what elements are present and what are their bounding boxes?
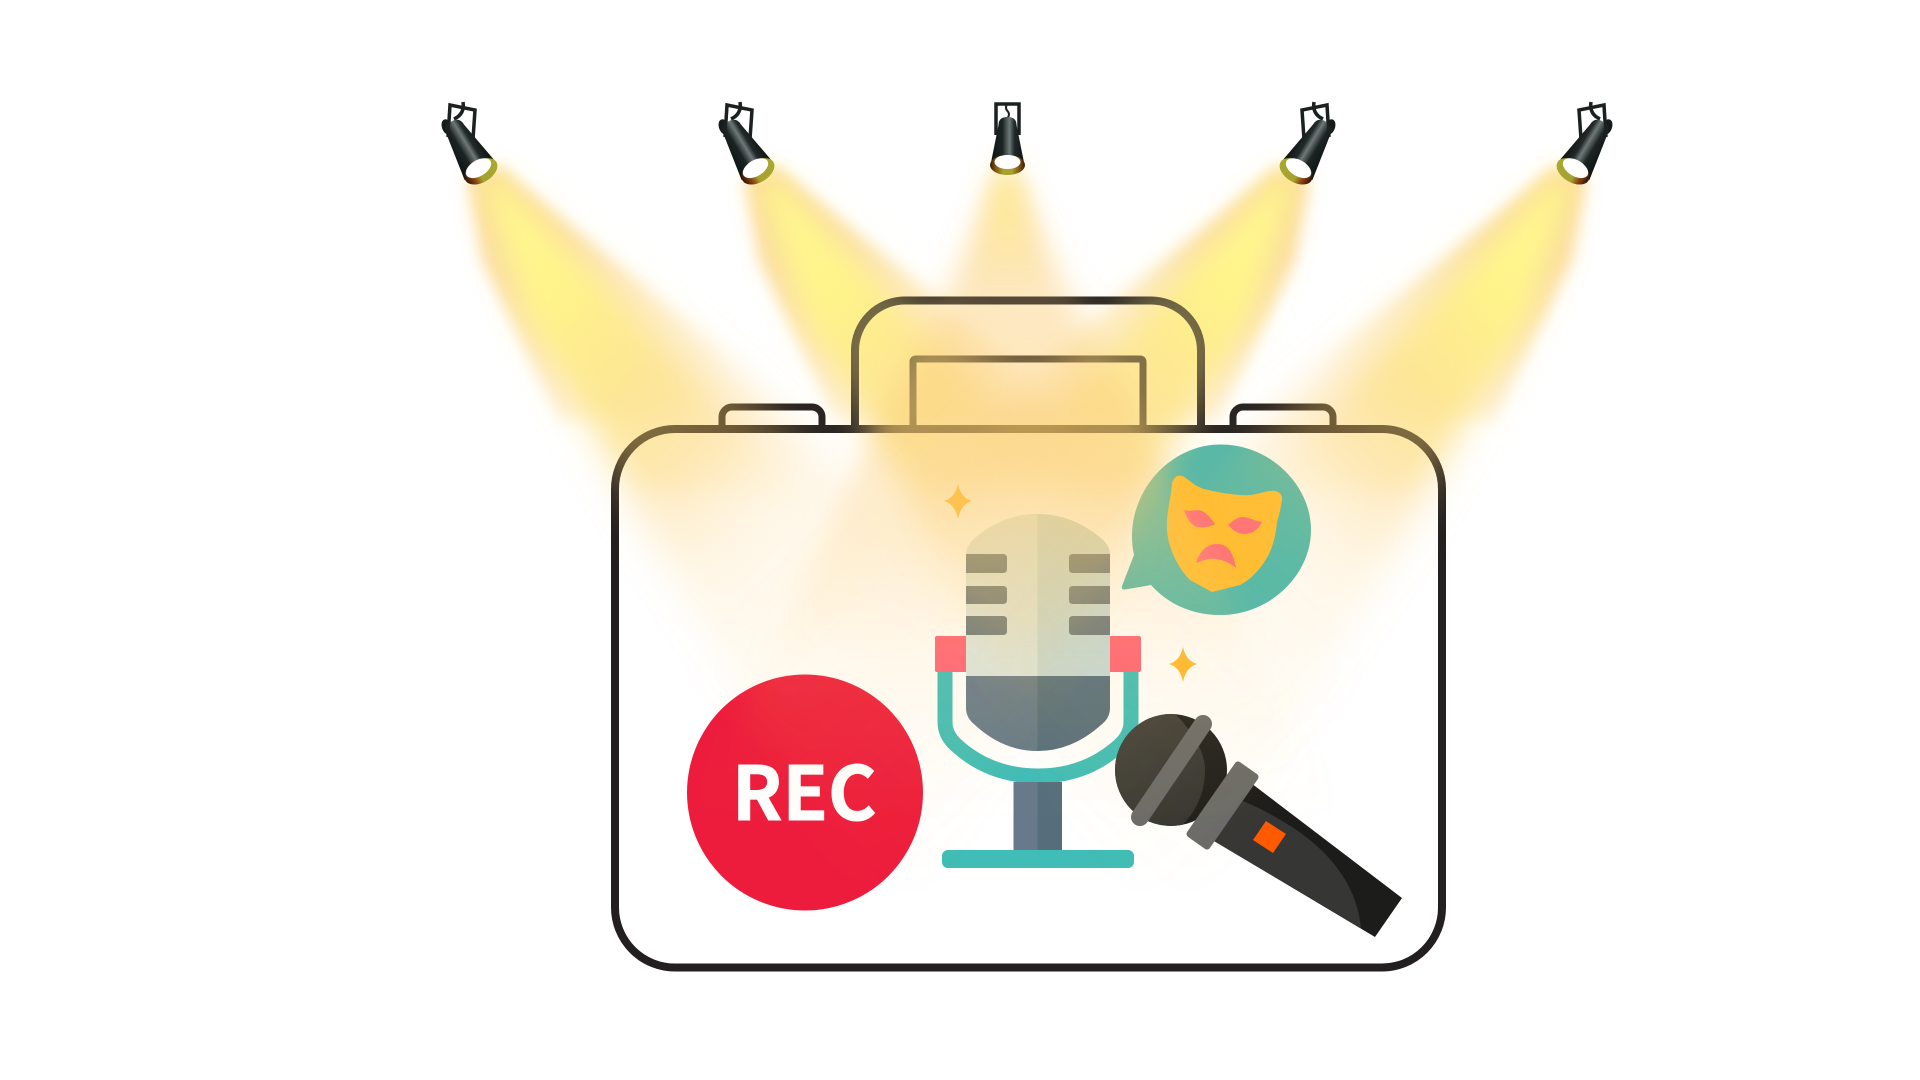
mic collar bbox=[1190, 765, 1255, 846]
illustration: spotlit suitcase bbox=[442, 102, 1612, 972]
bubble bbox=[1122, 444, 1311, 615]
spotlight 4 bbox=[1275, 102, 1342, 190]
mic head bbox=[966, 514, 1110, 751]
light beam cores bbox=[468, 165, 1586, 490]
beam 2 bbox=[757, 175, 1527, 960]
spotlight 2 bbox=[712, 102, 779, 190]
mask eyes and mouth bbox=[1184, 510, 1262, 568]
beam 3 bbox=[690, 170, 1340, 820]
mic grille bbox=[966, 554, 1110, 635]
mic stem bbox=[1014, 782, 1062, 850]
handheld microphone bbox=[1115, 714, 1402, 937]
spotlight 5 bbox=[1552, 102, 1619, 190]
REC badge bbox=[687, 674, 923, 910]
sparkle upper bbox=[944, 484, 972, 519]
studio microphone bbox=[935, 514, 1141, 868]
beam 4 bbox=[527, 175, 1297, 960]
mic base bbox=[942, 850, 1134, 868]
mic clamps bbox=[935, 636, 1141, 672]
spotlight 1 bbox=[435, 102, 502, 190]
inner handle bbox=[913, 359, 1143, 429]
left latch bbox=[722, 407, 822, 429]
right latch bbox=[1233, 407, 1333, 429]
mic ball bbox=[1115, 714, 1227, 826]
speech bubble with mask bbox=[1122, 444, 1311, 615]
mic switch bbox=[1253, 821, 1286, 853]
suitcase body bbox=[615, 429, 1442, 968]
mic handle bbox=[1214, 785, 1402, 937]
light beam haze bbox=[480, 170, 1574, 960]
suitcase bbox=[615, 300, 1442, 968]
mic ball band bbox=[1140, 724, 1203, 817]
mic cradle bbox=[945, 672, 1131, 776]
spotlight 3 bbox=[990, 103, 1025, 175]
outer handle bbox=[855, 300, 1201, 429]
REC badge: REC bbox=[732, 735, 877, 842]
theatre mask bbox=[1167, 476, 1282, 592]
beam 5 bbox=[804, 175, 1574, 960]
sparkle lower bbox=[1169, 647, 1197, 682]
beam 1 bbox=[480, 175, 1250, 960]
